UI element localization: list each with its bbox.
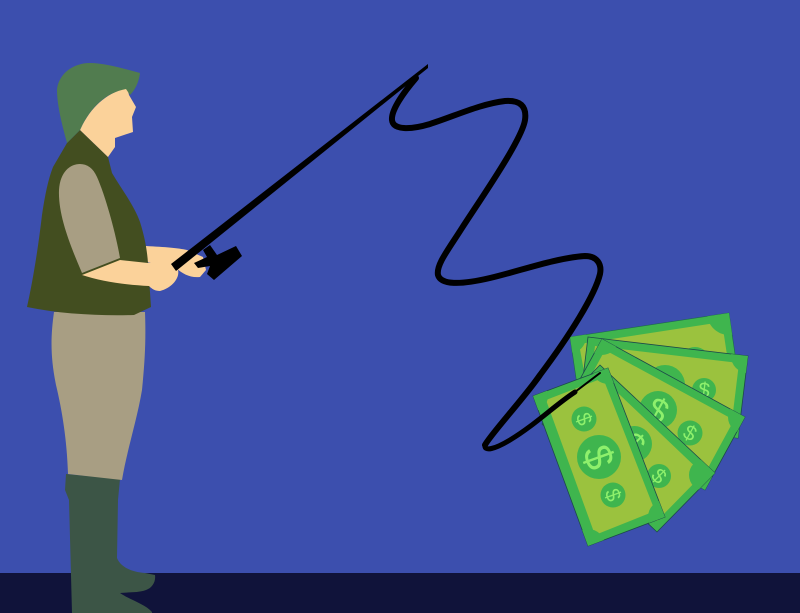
- banknote 1 front: $: [571, 410, 596, 429]
- banknote 5: [570, 312, 736, 380]
- banknote 3: $: [679, 421, 701, 446]
- vest: [27, 130, 151, 315]
- far arm: [146, 246, 206, 277]
- banknote 3: $: [640, 390, 675, 432]
- banknote 1 front: [532, 368, 666, 546]
- sleeve: [59, 164, 120, 273]
- rod: [171, 64, 428, 271]
- face and neck: [80, 83, 136, 157]
- trousers: [52, 312, 145, 480]
- banknote 4: $: [697, 378, 711, 403]
- banknote 2: $: [615, 425, 653, 463]
- banknote 4: [583, 336, 748, 438]
- banknote 1 front: $: [574, 439, 623, 475]
- boots: [65, 474, 155, 613]
- banknote 1 front: $: [600, 486, 625, 505]
- hat: [57, 63, 140, 143]
- banknote 2: $: [646, 464, 671, 489]
- banknote 3: [580, 339, 746, 490]
- fishing rod and reel: [171, 64, 428, 280]
- banknotes fan: [532, 312, 748, 546]
- reel: [194, 245, 242, 280]
- banknote 2: [542, 365, 721, 532]
- ground: [0, 573, 800, 613]
- fishing line: [392, 78, 600, 449]
- near arm and hand: [82, 260, 178, 291]
- fisherman figure: [27, 63, 206, 613]
